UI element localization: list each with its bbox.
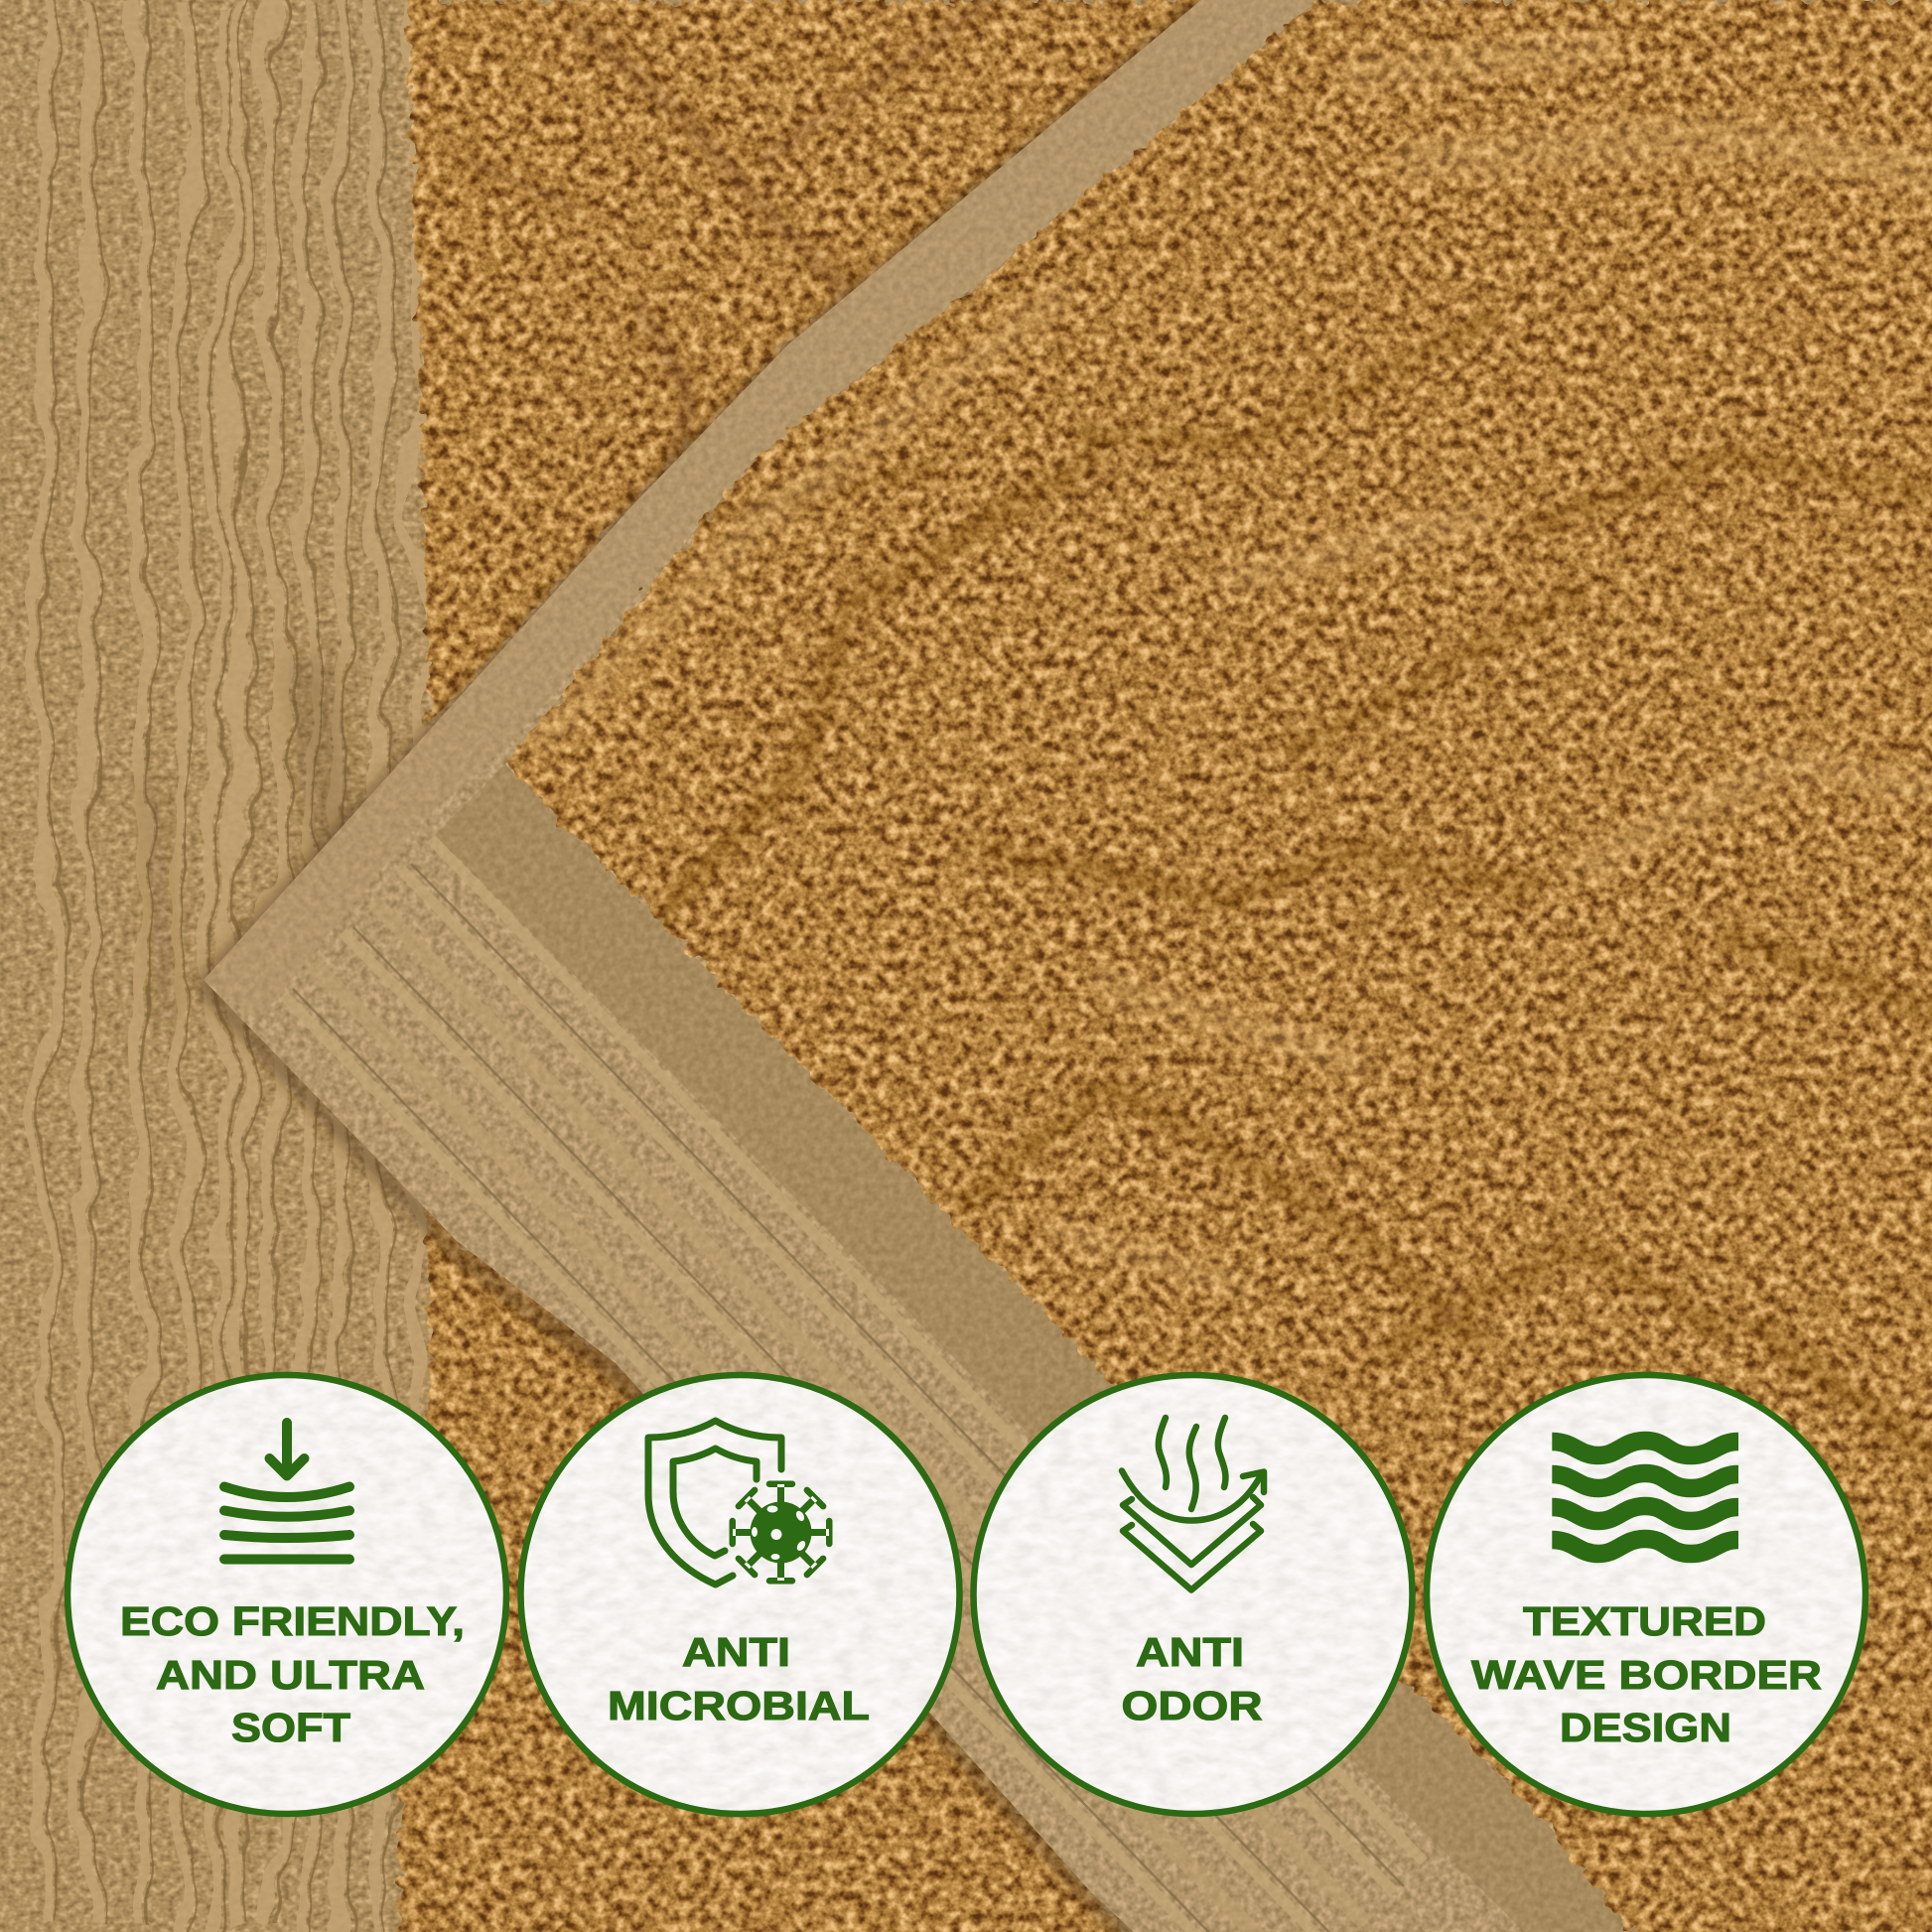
label: DESIGN xyxy=(1560,1705,1731,1750)
badge: eco friendly and ultra soft xyxy=(68,1375,506,1814)
dark crease shading on the woven towel xyxy=(149,655,343,1023)
label: ODOR xyxy=(1122,1683,1263,1728)
shadow beneath the folded towel xyxy=(204,5,1201,1932)
icon: four waves xyxy=(1552,1441,1738,1554)
icon: compressing layers xyxy=(224,1423,349,1559)
label: AND ULTRA xyxy=(156,1652,425,1698)
label: TEXTURED xyxy=(1523,1598,1766,1644)
icon: shield with microbe xyxy=(648,1421,832,1585)
label: ANTI xyxy=(682,1629,790,1675)
folded towel border band xyxy=(204,0,1653,1932)
badge: anti odor xyxy=(973,1375,1412,1814)
back terry towel xyxy=(397,0,1216,1932)
label: MICROBIAL xyxy=(608,1683,870,1728)
chevron pile shading xyxy=(542,50,1932,1453)
label: WAVE BORDER xyxy=(1471,1652,1822,1698)
badge: anti microbial xyxy=(520,1375,959,1814)
back terry shading xyxy=(469,0,986,1478)
front terry towel surface xyxy=(505,0,1932,1932)
stitched hem xyxy=(204,0,1318,1021)
icon: odor rising off fabric layers xyxy=(1122,1418,1264,1590)
label: ANTI xyxy=(1136,1629,1244,1675)
wavy woven ridges xyxy=(45,0,417,1932)
band ribs xyxy=(283,764,1653,1932)
badge: textured wave border design xyxy=(1427,1375,1865,1814)
label: ECO FRIENDLY, xyxy=(120,1598,465,1644)
label: SOFT xyxy=(231,1705,350,1750)
